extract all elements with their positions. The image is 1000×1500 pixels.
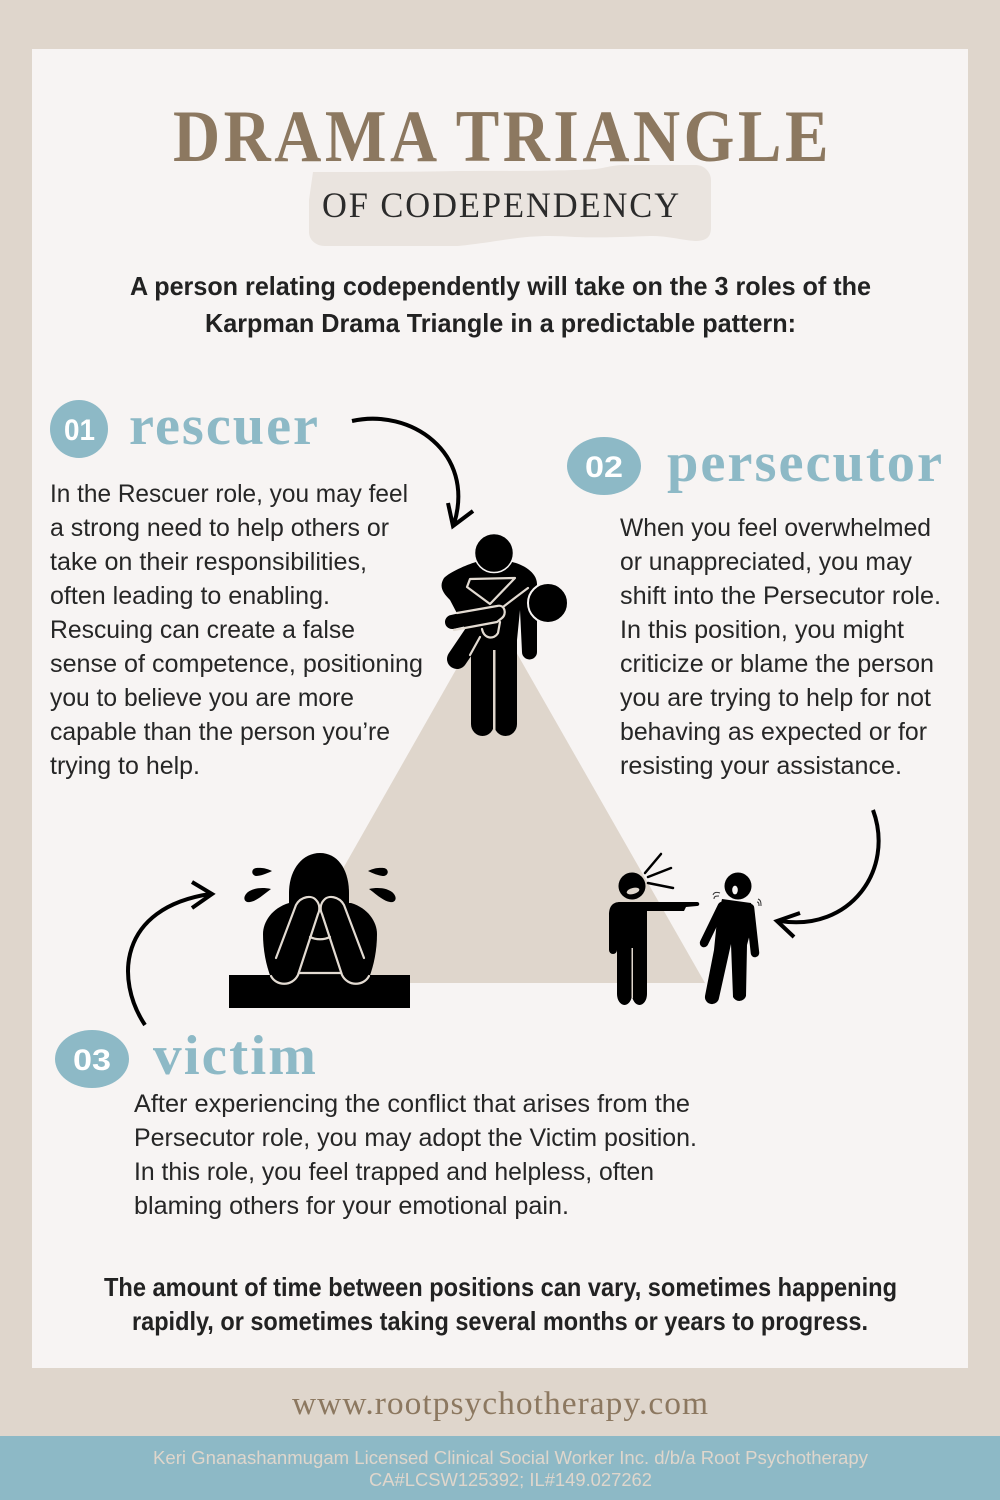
badge 03: 03	[73, 1044, 111, 1077]
badge 03	[55, 1030, 129, 1088]
rescuer body text: trying to help.	[50, 752, 200, 780]
persecutor body text: When you feel overwhelmed	[620, 514, 931, 542]
heading: victim: victim	[153, 1025, 318, 1087]
victim body text	[134, 1090, 697, 1220]
rescuer body text: a strong need to help others or	[50, 514, 389, 542]
intro text: Karpman Drama Triangle in a predictable pattern:	[205, 308, 796, 338]
heading: rescuer: rescuer	[129, 395, 320, 457]
rescuer body text: often leading to enabling.	[50, 582, 330, 610]
rescuer body text: In the Rescuer role, you may feel	[50, 480, 408, 508]
closing statement: The amount of time between positions can vary, sometimes happening	[104, 1272, 897, 1302]
panel: rescuer	[50, 395, 423, 780]
heading: persecutor: persecutor	[667, 432, 944, 494]
icon: persecutor pointing at person	[609, 854, 761, 1005]
closing statement	[104, 1272, 897, 1336]
rescuer body text: sense of competence, positioning	[50, 650, 423, 678]
victim body text: blaming others for your emotional pain.	[134, 1192, 569, 1220]
persecutor body text: criticize or blame the person	[620, 650, 934, 678]
persecutor body text: In this position, you might	[620, 616, 904, 644]
intro text: A person relating codependently will take on the 3 roles of the	[130, 271, 871, 301]
persecutor body text: you are trying to help for not	[620, 684, 931, 712]
rescuer body text: Rescuing can create a false	[50, 616, 355, 644]
rescuer body text: take on their responsibilities,	[50, 548, 367, 576]
website: www.rootpsychotherapy.com	[292, 1386, 709, 1422]
victim body text: In this role, you feel trapped and helpless, often	[134, 1158, 654, 1186]
triangle background	[278, 608, 705, 983]
arrow: rescuer to figure	[352, 419, 473, 526]
victim body text: Persecutor role, you may adopt the Victim position.	[134, 1124, 697, 1152]
footer band: Keri Gnanashanmugam Licensed Clinical Social Worker Inc. d/b/a Root Psychotherapy	[153, 1448, 868, 1468]
rescuer body text: capable than the person you’re	[50, 718, 390, 746]
footer band	[0, 1436, 1000, 1500]
arrow: persecutor to figures	[777, 810, 879, 937]
subtitle with brush highlight: OF CODEPENDENCY	[322, 185, 681, 225]
badge 01: 01	[64, 414, 95, 447]
persecutor body text: shift into the Persecutor role.	[620, 582, 941, 610]
badge 02	[567, 437, 641, 495]
closing statement: rapidly, or sometimes taking several months or years to progress.	[132, 1306, 868, 1336]
icon: rescuer carrying person	[442, 534, 568, 736]
persecutor body text	[620, 514, 941, 780]
rescuer body text	[50, 480, 423, 780]
panel: persecutor	[567, 432, 944, 780]
subtitle with brush highlight	[309, 165, 711, 246]
persecutor body text: or unappreciated, you may	[620, 548, 912, 576]
intro text	[130, 271, 871, 338]
persecutor body text: behaving as expected or for	[620, 718, 927, 746]
arrow: victim to figure	[128, 882, 212, 1025]
badge 01	[50, 400, 108, 458]
title: DRAMA TRIANGLE	[173, 96, 832, 178]
badge 02: 02	[585, 451, 623, 484]
icon: person crying with head in hands	[229, 853, 410, 1008]
persecutor body text: resisting your assistance.	[620, 752, 902, 780]
panel: victim	[55, 1025, 697, 1220]
victim body text: After experiencing the conflict that arises from the	[134, 1090, 690, 1118]
rescuer body text: you to believe you are more	[50, 684, 354, 712]
footer band: CA#LCSW125392; IL#149.027262	[369, 1470, 652, 1490]
